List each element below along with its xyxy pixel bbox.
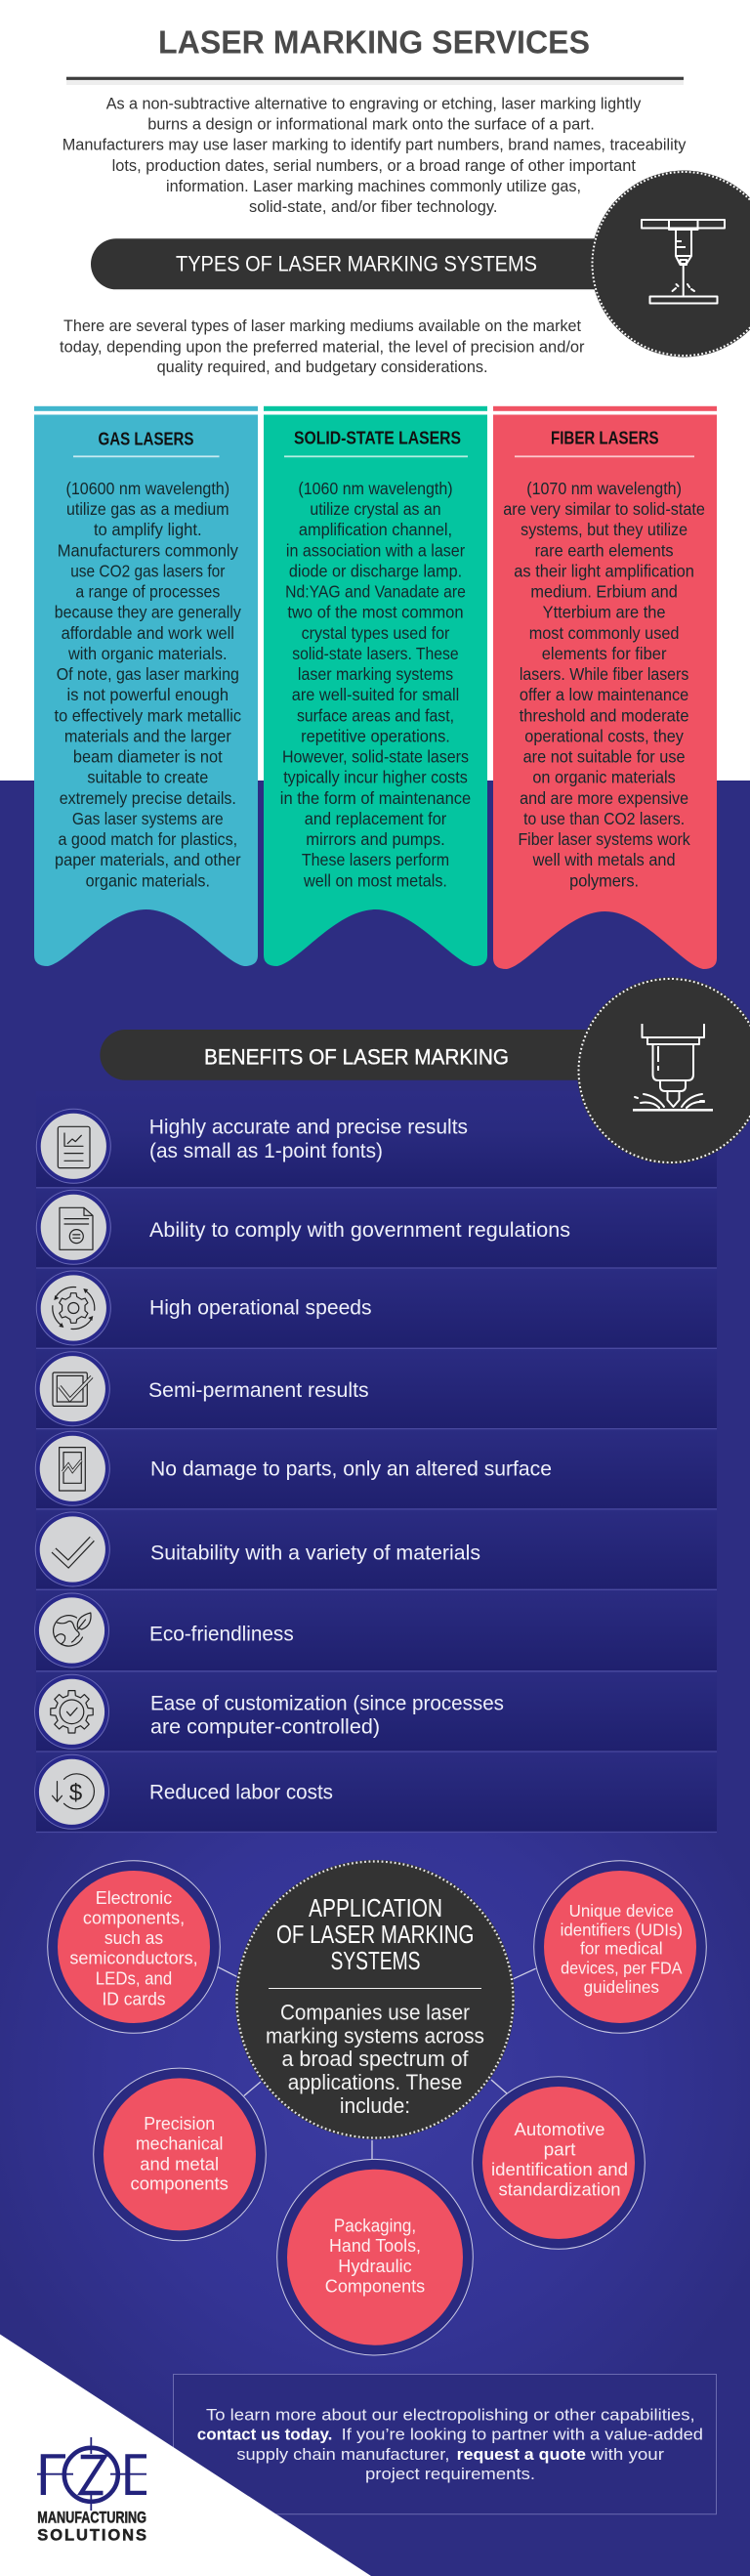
application node: automotive: part (544, 2138, 575, 2159)
application center circle: include: (340, 2093, 410, 2118)
icon: laser head circle (591, 170, 750, 358)
application node: electronic components: semiconductors, (69, 1947, 198, 1967)
panel: fiber lasers: polymers. (569, 870, 639, 890)
panel: fiber lasers: Fiber laser systems work (518, 829, 690, 849)
background: navy section (0, 781, 750, 2576)
call to action box: request a quote (457, 2445, 586, 2464)
panel: gas lasers: suitable to create (87, 768, 208, 787)
application node: electronic components (48, 1861, 220, 2033)
panel: fiber lasers: threshold and moderate (520, 705, 689, 725)
panel: solid-state lasers: repetitive operations. (301, 726, 450, 745)
panel: fiber lasers: medium. Erbium and (530, 582, 678, 602)
intro paragraph: burns a design or informational mark onto the surface of a part. (147, 115, 595, 134)
application node: precision components (94, 2068, 266, 2241)
panel: fiber lasers: as their light amplification (514, 561, 694, 580)
benefit 4: Semi-permanent results (148, 1379, 369, 1402)
panel: fiber lasers: operational costs, they (524, 726, 684, 745)
panel: fiber lasers: on organic materials (532, 768, 676, 787)
panel: solid-state lasers: Nd:YAG and Vanadate are (285, 582, 466, 602)
panel: solid-state lasers: utilize crystal as an (310, 499, 441, 519)
application node: unique device identifiers: guidelines (584, 1977, 659, 1997)
section banner: benefits of laser marking (100, 1030, 607, 1080)
call to action box: project requirements. (365, 2465, 535, 2483)
types intro paragraph: There are several types of laser marking mediums available on the market (63, 317, 581, 335)
panel: solid-state lasers: in association with a laser (286, 540, 465, 560)
application center circle: a broad spectrum of (281, 2047, 469, 2071)
panel: solid-state lasers: solid-state lasers. These (292, 644, 459, 663)
panel: solid-state lasers: laser marking systems (298, 664, 453, 684)
panel: gas lasers: beam diameter is not (73, 747, 223, 767)
panel: fiber lasers: well with metals and (532, 850, 676, 869)
panel: solid-state lasers: amplification channel, (299, 520, 452, 539)
panel: solid-state lasers: diode or discharge lamp. (289, 561, 462, 580)
icon: regulation document (36, 1190, 110, 1264)
panel: fiber lasers: most commonly used (529, 623, 679, 643)
benefit 7 (35, 1593, 294, 1668)
application node: unique device identifiers (534, 1861, 706, 2033)
application node: electronic components: ID cards (102, 1988, 166, 2008)
panel: solid-state lasers (264, 406, 487, 966)
call to action box: supply chain manufacturer, (236, 2445, 449, 2464)
call to action box: To learn more about our electropolishing or other capabilities, (206, 2406, 695, 2425)
panel: solid-state lasers: surface areas and fast, (297, 705, 454, 725)
application center circle (235, 1860, 515, 2139)
benefit 1: Highly accurate and precise results (149, 1117, 468, 1139)
icon: gear with check (35, 1674, 109, 1749)
panel: fiber lasers: rare earth elements (535, 540, 674, 560)
logo: FZE manufacturing solutions: SOLUTIONS (37, 2527, 146, 2545)
panel: gas lasers: paper materials, and other (55, 850, 241, 869)
call to action box (174, 2374, 717, 2514)
panel: fiber lasers: and are more expensive (520, 788, 688, 808)
panel: gas lasers: affordable and work well (62, 623, 234, 643)
benefit 5 (35, 1431, 552, 1505)
panel: gas lasers: (10600 nm wavelength) (66, 479, 229, 498)
application node: unique device identifiers: Unique device (569, 1901, 674, 1921)
application node: automotive: identification and (491, 2159, 628, 2179)
icon: dollar reduction (35, 1754, 109, 1829)
panel: fiber lasers: are not suitable for use (523, 747, 686, 767)
panel: gas lasers: a range of processes (75, 582, 220, 602)
panel: fiber lasers: systems, but they utilize (521, 520, 688, 539)
benefit 2 (36, 1190, 570, 1264)
panel: solid-state lasers: However, solid-state lasers (282, 747, 469, 767)
background: lighter glow behind applications (0, 1661, 750, 2576)
application node: packaging: Hydraulic (338, 2256, 412, 2276)
application node: automotive: standardization (498, 2178, 621, 2199)
benefit 3: High operational speeds (149, 1297, 372, 1320)
panel: gas lasers: Gas laser systems are (72, 809, 224, 828)
white corner triangle (0, 2335, 371, 2576)
benefit 9: Reduced labor costs (149, 1782, 333, 1804)
application node: precision components: Precision (144, 2113, 215, 2133)
panel: gas lasers: use CO2 gas lasers for (70, 561, 226, 580)
panel: gas lasers: Manufacturers commonly (58, 540, 238, 560)
benefit 8 (35, 1674, 504, 1749)
benefit rows backgrounds (36, 1091, 717, 1833)
application center circle: Companies use laser (280, 2000, 470, 2024)
panel: fiber lasers: elements for fiber (542, 644, 667, 663)
section banner: types of laser marking systems (91, 238, 618, 289)
panel: solid-state lasers: mirrors and pumps. (306, 829, 445, 849)
benefit 3 (36, 1271, 372, 1345)
call to action box: If you’re looking to partner with a value-added (342, 2425, 703, 2444)
panel: solid-state lasers: SOLID-STATE LASERS (294, 428, 461, 448)
panel: gas lasers: to effectively mark metallic (55, 705, 241, 725)
application node: precision components: and metal (140, 2153, 219, 2174)
call to action box: contact us today. (197, 2425, 332, 2444)
logo: FZE manufacturing solutions (37, 2437, 146, 2545)
benefit 4 (35, 1352, 369, 1426)
intro paragraph: solid-state, and/or fiber technology. (249, 197, 497, 216)
application center circle: SYSTEMS (330, 1948, 421, 1975)
types intro paragraph: quality required, and budgetary considerations. (157, 358, 488, 376)
icon: report chart (36, 1109, 110, 1183)
panel: gas lasers: organic materials. (86, 870, 210, 890)
icon: rotating gear (36, 1271, 110, 1345)
application center circle: OF LASER MARKING (276, 1921, 474, 1949)
application node: electronic components: LEDs, and (96, 1968, 172, 1989)
application center circle: applications. These (288, 2070, 462, 2094)
panel: fiber lasers: Ytterbium are the (543, 603, 666, 622)
application node: unique device identifiers: devices, per FDA (561, 1958, 683, 1977)
panel: gas lasers: with organic materials. (67, 644, 228, 663)
benefit 9 (35, 1754, 333, 1829)
benefit 7: Eco-friendliness (149, 1623, 294, 1645)
benefit 1: (as small as 1-point fonts) (149, 1140, 383, 1162)
panel: gas lasers: Of note, gas laser marking (57, 664, 239, 684)
panel: fiber lasers: FIBER LASERS (551, 428, 659, 448)
icon: surface mark (35, 1431, 109, 1505)
panel: gas lasers: because they are generally (55, 603, 241, 622)
panel: fiber lasers: (1070 nm wavelength) (526, 479, 682, 498)
panel: gas lasers: utilize gas as a medium (66, 499, 229, 519)
application node: packaging: Packaging, (334, 2216, 416, 2236)
benefit 6 (35, 1512, 480, 1586)
section banner: benefits of laser marking: BENEFITS OF LASER MARKING (204, 1044, 509, 1069)
panel: fiber lasers: are very similar to solid-state (503, 499, 705, 519)
application node: packaging: Hand Tools, (329, 2235, 421, 2256)
icon: dollar reduction: $ (69, 1780, 82, 1806)
intro paragraph: lots, production dates, serial numbers, or a broad range of other important (112, 156, 636, 175)
application node: unique device identifiers: for medical (580, 1939, 663, 1959)
panel: fiber lasers: offer a low maintenance (520, 685, 688, 704)
application center circle: marking systems across (266, 2024, 484, 2048)
application node: unique device identifiers: identifiers (UDIs) (561, 1920, 683, 1939)
panel: solid-state lasers: typically incur higher costs (283, 768, 468, 787)
panel: solid-state lasers: (1060 nm wavelength) (298, 479, 453, 498)
application node: precision components: components (131, 2174, 229, 2194)
panel: gas lasers: to amplify light. (94, 520, 202, 539)
panel: gas lasers: is not powerful enough (67, 685, 229, 704)
benefit 2: Ability to comply with government regulations (149, 1219, 570, 1242)
benefit 6: Suitability with a variety of materials (150, 1541, 480, 1564)
application node: packaging (277, 2159, 473, 2355)
application node: electronic components: Electronic (96, 1887, 172, 1908)
title: LASER MARKING SERVICES (158, 23, 590, 61)
benefit 8: Ease of customization (since processes (150, 1693, 504, 1715)
panel: gas lasers: a good match for plastics, (58, 829, 237, 849)
application center circle: APPLICATION (309, 1895, 442, 1922)
panel: solid-state lasers: in the form of maintenance (280, 788, 471, 808)
panel: gas lasers: extremely precise details. (60, 788, 236, 808)
call to action box: with your (590, 2445, 664, 2464)
panel: gas lasers: materials and the larger (64, 726, 231, 745)
section banner: types of laser marking systems: TYPES OF LASER MARKING SYSTEMS (176, 252, 537, 276)
application node: packaging: Components (325, 2275, 425, 2296)
benefit 5: No damage to parts, only an altered surface (150, 1458, 552, 1481)
application node: automotive: Automotive (514, 2119, 605, 2139)
intro paragraph (62, 95, 687, 216)
benefit 8: are computer-controlled) (150, 1716, 380, 1739)
panel: fiber lasers: to use than CO2 lasers. (523, 809, 685, 828)
icon: laser nozzle circle (577, 977, 750, 1164)
panel: fiber lasers: lasers. While fiber lasers (520, 664, 689, 684)
icon: globe with leaf (35, 1593, 109, 1668)
logo: FZE manufacturing solutions: MANUFACTURING (37, 2510, 146, 2527)
panel: solid-state lasers: two of the most common (287, 603, 464, 622)
panel: gas lasers: GAS LASERS (98, 428, 193, 448)
application node: automotive (473, 2077, 645, 2249)
icon: checkbox (35, 1352, 109, 1426)
intro paragraph: As a non-subtractive alternative to engraving or etching, laser marking lightly (106, 95, 642, 113)
application node: electronic components: components, (83, 1907, 185, 1927)
panel: solid-state lasers: crystal types used for (302, 623, 450, 643)
application node: precision components: mechanical (136, 2133, 223, 2154)
intro paragraph: information. Laser marking machines commonly utilize gas, (166, 177, 581, 195)
types intro paragraph: today, depending upon the preferred material, the level of precision and/or (60, 337, 585, 356)
panel: fiber lasers (493, 406, 717, 969)
intro paragraph: Manufacturers may use laser marking to identify part numbers, brand names, traceability (62, 136, 687, 154)
application node: electronic components: such as (104, 1927, 163, 1948)
panel: gas lasers (34, 406, 258, 966)
panel: solid-state lasers: are well-suited for small (292, 685, 459, 704)
panel: solid-state lasers: and replacement for (305, 809, 446, 828)
benefit 1 (36, 1109, 468, 1183)
panel: solid-state lasers: well on most metals. (303, 870, 447, 890)
panel: solid-state lasers: These lasers perform (302, 850, 449, 869)
connector lines (218, 1967, 536, 2159)
icon: check mark (35, 1512, 109, 1586)
types intro paragraph (60, 317, 585, 376)
